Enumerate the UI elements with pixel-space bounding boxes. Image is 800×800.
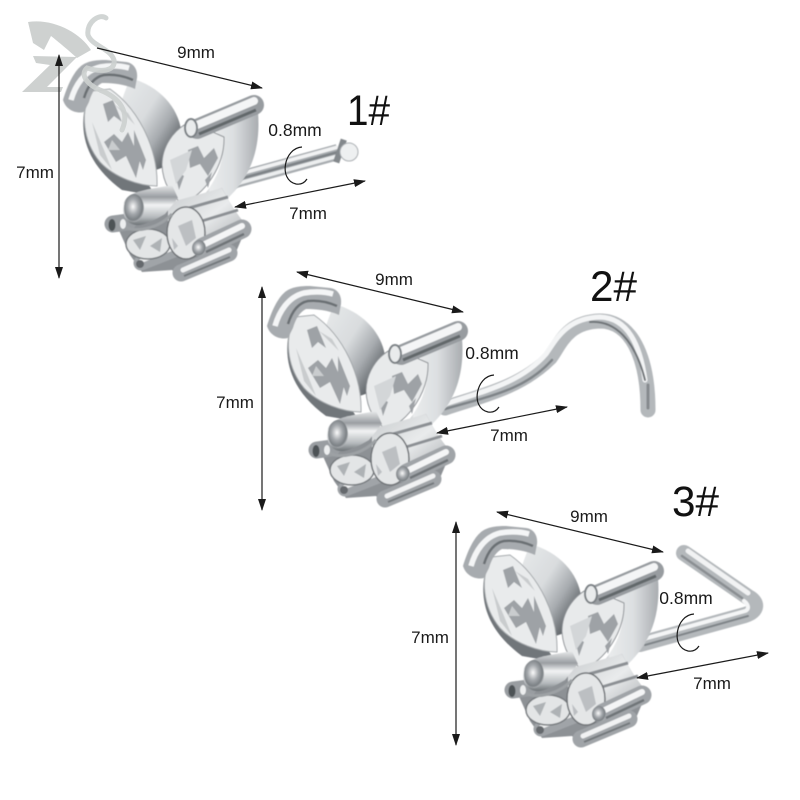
logo: ZS watermark (22, 17, 125, 130)
label: 7mm height: 7mm (411, 628, 449, 647)
arrow: 7mm post length (637, 653, 768, 678)
label: 3#: 3# (672, 478, 719, 526)
dimensions: 2# (216, 270, 567, 510)
butterfly stud 2# (267, 286, 462, 506)
pin: L-bend post, 3# (640, 551, 755, 645)
gauge mark (477, 375, 499, 412)
label: 0.8mm: 0.8mm (659, 588, 713, 608)
gauge mark (285, 147, 307, 184)
label: 7mm height: 7mm (16, 163, 54, 182)
label: 9mm: 9mm (177, 43, 215, 62)
arrow: 7mm height (455, 522, 457, 745)
arrow: 9mm width (297, 272, 463, 312)
arrow: 9mm width (497, 512, 663, 552)
label: 9mm: 9mm (570, 507, 608, 526)
label: 7mm post length: 7mm (490, 426, 528, 445)
pin: curved screw post, 2# (445, 317, 648, 410)
arrow: 9mm width (97, 48, 262, 88)
label: 7mm post length: 7mm (693, 674, 731, 693)
dimensions: 1# (16, 43, 365, 278)
label: 2#: 2# (590, 263, 637, 311)
label: 7mm post length: 7mm (289, 204, 327, 223)
arrow: 7mm post length (235, 181, 365, 207)
label: 0.8mm: 0.8mm (465, 343, 519, 363)
arrow: 7mm height (58, 55, 60, 278)
arrow: 7mm height (261, 287, 263, 510)
label: 0.8mm: 0.8mm (268, 120, 322, 140)
label: 7mm height: 7mm (216, 393, 254, 412)
butterfly stud 1# (63, 60, 258, 280)
butterfly stud 3# (463, 526, 658, 746)
gauge mark (677, 614, 699, 651)
dimensions: 3# (411, 507, 768, 745)
arrow: 7mm post length (437, 407, 567, 433)
pin: straight post with ball end, 1# (232, 143, 358, 185)
label: 1#: 1# (347, 87, 390, 135)
label: 9mm: 9mm (375, 270, 413, 289)
